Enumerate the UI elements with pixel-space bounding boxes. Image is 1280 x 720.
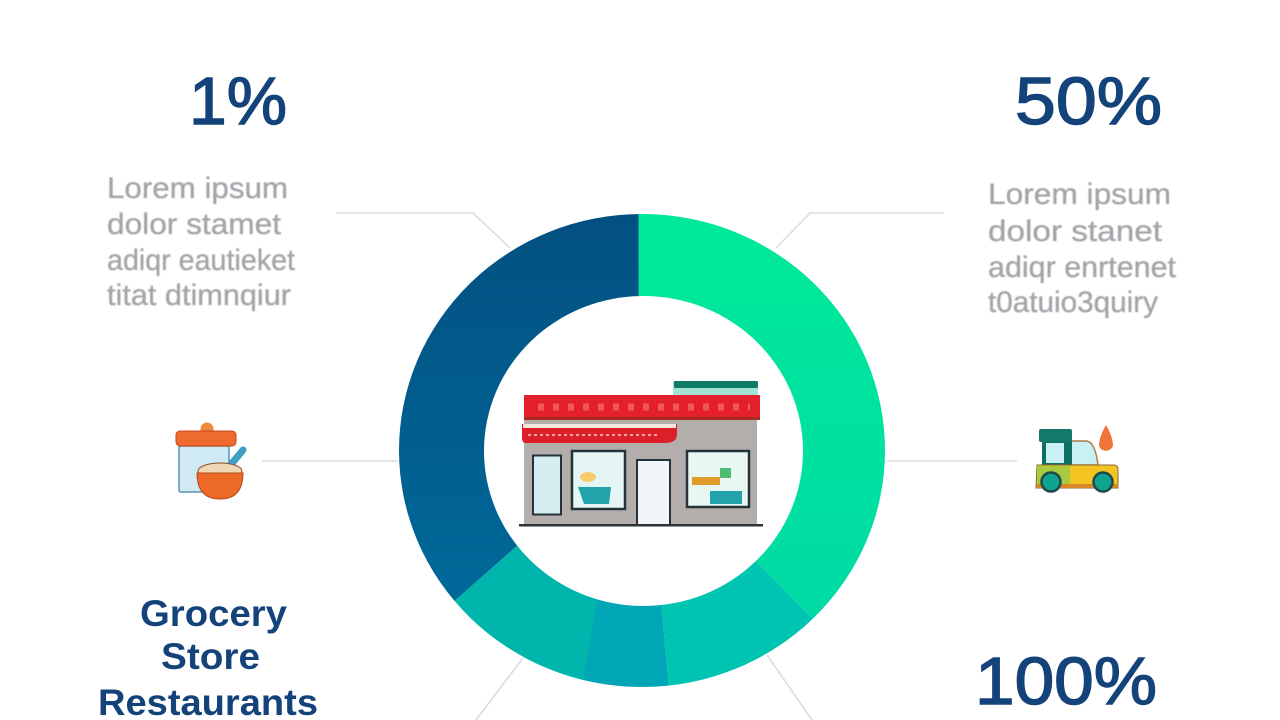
text block: right description: t0atuio3quiry bbox=[988, 286, 1158, 319]
text block: right description: dolor stanet bbox=[988, 215, 1163, 248]
text block: left description: Lorem ipsum bbox=[107, 172, 288, 205]
text block: left description: titat dtimnqiur bbox=[107, 279, 291, 312]
wheels bbox=[1042, 472, 1060, 492]
text block: left description bbox=[107, 172, 296, 312]
segment: green bbox=[638, 214, 885, 618]
window middle bbox=[572, 451, 625, 509]
text block: left description: adiqr eautieket bbox=[107, 244, 296, 277]
fuel drop bbox=[1099, 425, 1113, 451]
stat: 100%: 100% bbox=[975, 644, 1157, 719]
cab bbox=[1070, 441, 1098, 465]
stat: 50%: 50% bbox=[1015, 64, 1162, 139]
connector lines bbox=[262, 213, 1017, 720]
window right bbox=[687, 451, 749, 507]
icon: truck with fuel drop bbox=[1036, 425, 1118, 492]
building wall bbox=[524, 418, 757, 524]
text block: left description: dolor stamet bbox=[107, 208, 282, 241]
segment: teal right bbox=[661, 561, 813, 686]
red banner bbox=[524, 395, 760, 420]
heading: Grocery Store Restaurants: Store bbox=[161, 636, 260, 677]
door bbox=[637, 460, 670, 525]
heading: Grocery Store Restaurants: Grocery bbox=[140, 593, 287, 634]
awning bbox=[522, 424, 677, 443]
icon: cooking pot and bowl bbox=[176, 422, 243, 499]
segment: teal left bbox=[454, 546, 598, 680]
truck body bbox=[1036, 465, 1118, 488]
heading: Grocery Store Restaurants bbox=[98, 593, 318, 720]
stat: 1%: 1% bbox=[189, 64, 287, 139]
roof sign bbox=[673, 381, 758, 395]
text block: right description: adiqr enrtenet bbox=[988, 251, 1177, 284]
ground line bbox=[519, 524, 763, 526]
text block: right description: Lorem ipsum bbox=[988, 178, 1171, 211]
donut chart bbox=[399, 214, 885, 687]
segment: navy blue bbox=[399, 214, 638, 601]
segment: cyan bottom bbox=[584, 600, 669, 687]
window left bbox=[533, 456, 561, 514]
icon: storefront bbox=[519, 381, 763, 526]
text block: right description bbox=[988, 178, 1177, 319]
